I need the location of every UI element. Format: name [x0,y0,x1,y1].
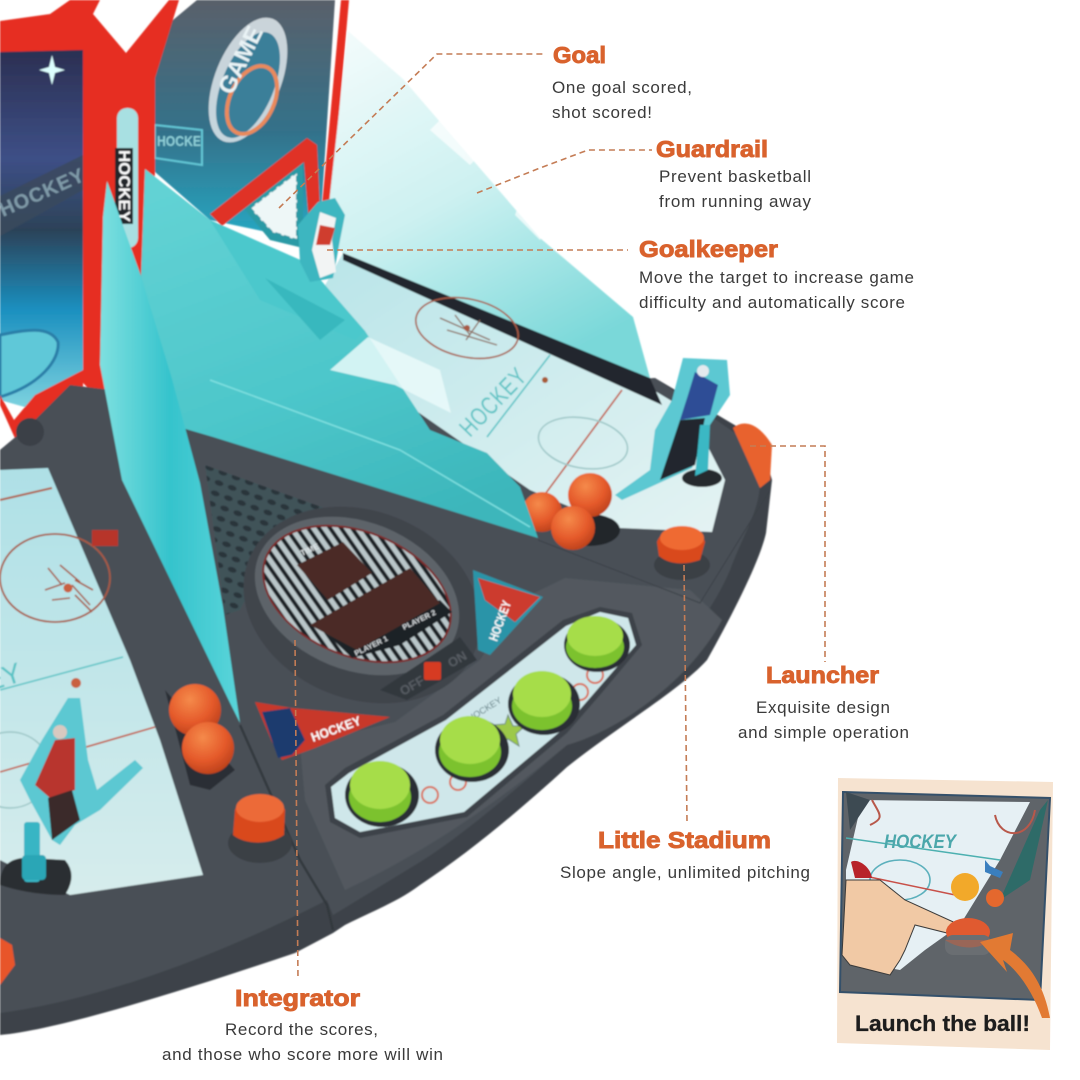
goal with hexagon net [210,138,321,248]
central mesh panel [205,465,330,615]
callout: Integrator: and those who score more will win [162,1045,443,1064]
inset curved arrow [980,933,1050,1018]
inset: launch the ball illustration [837,778,1053,1050]
callout: Little Stadium: Little Stadium [598,827,771,853]
inset paper card [837,778,1053,1050]
callout: Integrator: Record the scores, [225,1020,378,1039]
scoreboard integrator: PLAYER 1 [353,634,389,658]
right player with blue jersey [615,358,730,500]
inset caption: Launch the ball! [855,1011,1030,1036]
game base platform [0,378,772,1035]
callout: Little Stadium: Slope angle, unlimited pitching [560,863,810,882]
green launcher button 1 [345,761,419,827]
callout: Goalkeeper: difficulty and automatically score [639,293,905,312]
callout: Launcher [738,662,909,742]
left arm red slot [92,530,118,546]
scoreboard integrator: PLAYER 2 [401,608,437,632]
power switch [380,637,477,700]
launcher button panel: HOCKEY [466,695,503,724]
callout: Goalkeeper: Move the target to increase game [639,268,914,287]
sticker: vertical hockey label [115,108,138,248]
sticker: right hockey badge: HOCKEY [486,598,514,643]
orange launcher left [228,794,292,863]
goalkeeper target [298,198,345,282]
callout: Goalkeeper: Goalkeeper [639,236,778,262]
callout: Integrator [162,985,443,1064]
callout: Guardrail [656,136,812,211]
back guardrail panel [325,31,650,378]
pocket and balls on the right [522,473,620,550]
callout: Goal [552,42,692,122]
sticker: vertical hockey label: HOCKEY [115,150,132,222]
hockey toy photograph illustration [0,0,772,1035]
callout: Guardrail: from running away [659,192,812,211]
callout: Goal: One goal scored, [552,78,692,97]
power switch: OFF [397,673,427,699]
power switch: ON [445,648,469,671]
callout: Guardrail: Guardrail [656,136,768,162]
sticker: lower hockey badge [255,702,390,760]
left player with red jersey [20,698,143,882]
callout: Goal: shot scored! [552,103,652,122]
backboard: left arena panel [0,50,89,410]
callout: Little Stadium [560,827,810,882]
orange side trigger top right [733,423,772,488]
callout: Integrator: Integrator [235,985,360,1011]
callout: Launcher: Exquisite design [756,698,890,717]
back rink ice surface [300,253,725,532]
red backboard frame [0,0,349,450]
inset drawing: HOCKEY [884,832,958,853]
callout: Launcher: Launcher [766,662,879,688]
orange side trigger bottom left [0,938,15,985]
backboard: right arena panel with logo [155,0,335,240]
backboard: right arena panel with logo: GAME [213,22,269,99]
left rink ice surface [0,468,203,895]
inset drawing [840,792,1050,1000]
scoreboard integrator: TIME [299,542,321,558]
sticker: right hockey badge [473,570,543,655]
launcher button panel [325,607,642,838]
green launcher button 2 [435,716,509,782]
green launcher button 4 [564,616,630,672]
callout: Guardrail: Prevent basketball [659,167,811,186]
callout: Launcher: and simple operation [738,723,909,742]
callout: Goalkeeper [639,236,914,312]
sticker: lower hockey badge: HOCKEY [309,713,363,745]
left guardrail panel [100,181,240,723]
scoreboard integrator [214,472,510,738]
dashed leader lines [279,54,825,980]
front guardrail panel [141,169,538,538]
green launcher button 3 [508,671,580,735]
pocket and balls on the left [165,684,235,790]
back rink ice surface: HOCKEY [454,362,533,442]
orange launcher right [654,526,710,580]
callout: Goal: Goal [553,42,606,68]
backboard: right arena panel with logo: HOCKE [157,133,201,150]
